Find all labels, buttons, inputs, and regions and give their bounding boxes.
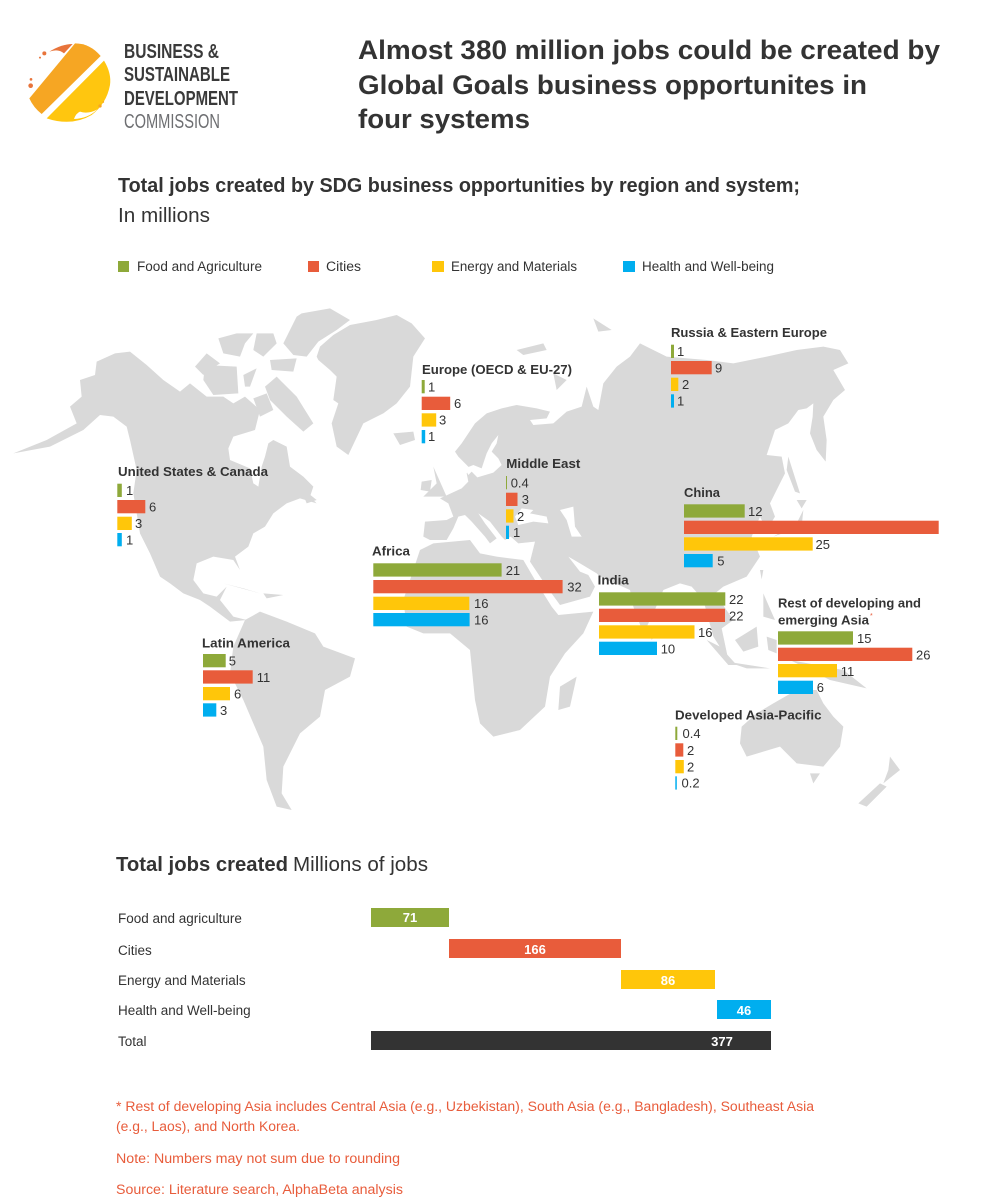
region: Russia & Eastern Europe: 1 — [677, 344, 684, 359]
footnotes — [116, 1099, 814, 1197]
row: food and agriculture — [118, 908, 449, 927]
inland seas — [465, 435, 582, 537]
row: energy and materials: Energy and Materials — [118, 973, 246, 988]
region: Middle East: 0.4 — [511, 476, 529, 490]
region: Latin America: 6 — [234, 686, 241, 702]
region: Russia & Eastern Europe: 9 — [715, 360, 722, 376]
region: Africa: Africa — [372, 544, 411, 559]
logo wordmark: COMMISSION — [124, 111, 220, 133]
region: United States & Canada: 1 — [126, 483, 133, 498]
region: Middle East: 1 — [513, 525, 520, 540]
Africa — [403, 540, 593, 737]
main title: Global Goals business opportunites in — [358, 70, 867, 100]
region: Europe: Europe (OECD & EU-27) — [422, 362, 572, 377]
row: health and well-being: Health and Well-being — [118, 1003, 251, 1018]
Eurasia — [423, 343, 848, 660]
region: Rest of developing and emerging Asia — [778, 596, 930, 695]
region: Latin America: 3 — [220, 703, 227, 718]
region: United States & Canada: 6 — [149, 500, 156, 514]
region: India: 10 — [661, 642, 675, 656]
row: energy and materials: 86 — [661, 973, 675, 988]
logo: Business & Sustainable Development Commission — [28, 41, 238, 133]
region: India: India — [598, 572, 629, 587]
logo mark: globe — [28, 43, 110, 122]
region: Latin America: 5 — [229, 654, 236, 668]
region: Europe: 1 — [428, 429, 435, 444]
region: Russia & Eastern Europe: 2 — [682, 377, 689, 392]
region: Rest of developing and emerging Asia: * — [870, 613, 873, 620]
footnotes: Source: Literature search, AlphaBeta analysis — [116, 1182, 403, 1197]
main title: four systems — [358, 104, 530, 134]
logo wordmark: SUSTAINABLE — [124, 64, 230, 86]
region: Africa: 32 — [567, 580, 582, 594]
region: Rest of developing and emerging Asia: Rest of developing and — [778, 596, 921, 611]
row: cities: 166 — [524, 942, 546, 957]
region: United States & Canada: 3 — [135, 516, 142, 531]
region: Rest of developing and emerging Asia: 15 — [857, 631, 871, 646]
region: Latin America: Latin America — [202, 635, 291, 650]
region: Africa — [372, 544, 582, 628]
region: United States & Canada: 1 — [126, 532, 133, 548]
region: Developed Asia-Pacific: 2 — [687, 760, 694, 774]
region: Latin America: 11 — [257, 670, 270, 685]
region: Rest of developing and emerging Asia: emerging Asia — [778, 612, 870, 627]
region: Europe: 6 — [454, 396, 461, 411]
region: Rest of developing and emerging Asia: 6 — [817, 680, 824, 695]
region: China: China — [684, 485, 721, 500]
main title — [358, 35, 940, 134]
region: Russia & Eastern Europe: 1 — [677, 394, 684, 408]
region: Developed Asia-Pacific: 0.2 — [682, 776, 700, 790]
region: Middle East — [506, 456, 581, 540]
legend — [118, 259, 774, 274]
region: India: 22 — [729, 592, 743, 607]
legend: Energy and Materials — [451, 259, 577, 274]
logo wordmark — [124, 41, 238, 133]
logo wordmark: BUSINESS & — [124, 41, 219, 63]
chart heading: In millions — [118, 205, 210, 227]
region: Europe: 1 — [428, 380, 435, 394]
row: food and agriculture: 71 — [403, 910, 417, 925]
region: Middle East: 2 — [517, 509, 524, 524]
row: total: Total — [118, 1034, 147, 1049]
region: India: 22 — [729, 608, 743, 624]
Greenland — [317, 315, 425, 455]
region: Africa: 21 — [506, 563, 520, 578]
region: Middle East: Middle East — [506, 456, 581, 471]
row: cities: Cities — [118, 943, 152, 958]
region: Middle East: 3 — [522, 492, 529, 507]
region: Rest of developing and emerging Asia: 11 — [841, 664, 854, 679]
footnotes: * Rest of developing Asia includes Central Asia (e.g., Uzbekistan), South Asia (e.g., Bangladesh), Southeast Asia — [116, 1099, 814, 1114]
main title: Almost 380 million jobs could be created by — [358, 35, 940, 65]
legend: Cities — [326, 259, 361, 274]
total jobs waterfall chart — [118, 908, 771, 1050]
chart heading: Total jobs created by SDG business opportunities by region and system; — [118, 175, 800, 197]
legend: Health and Well-being — [642, 259, 774, 274]
row: health and well-being: 46 — [737, 1003, 751, 1018]
row: food and agriculture: Food and agriculture — [118, 911, 242, 926]
region: China — [684, 485, 939, 568]
footnotes: Note: Numbers may not sum due to rounding — [116, 1151, 400, 1166]
region: Rest of developing and emerging Asia: 26 — [916, 648, 930, 662]
logo wordmark: DEVELOPMENT — [124, 88, 238, 110]
region: Africa: 16 — [474, 596, 488, 611]
chart heading — [118, 175, 800, 227]
region: Developed Asia-Pacific — [675, 707, 822, 790]
region: Latin America — [202, 635, 291, 718]
row: total: 377 — [711, 1034, 733, 1049]
row: energy and materials — [118, 970, 715, 989]
total jobs heading — [116, 854, 428, 876]
world map — [13, 308, 900, 810]
region: Europe — [422, 362, 572, 444]
region: United States & Canada — [117, 464, 269, 548]
region: China: 12 — [748, 504, 762, 519]
row: total — [118, 1031, 771, 1050]
region: Europe: 3 — [439, 412, 446, 428]
row: cities — [118, 939, 621, 958]
total jobs heading: Total jobs created — [116, 854, 288, 876]
legend: Food and Agriculture — [137, 259, 262, 274]
row: health and well-being — [118, 1000, 771, 1019]
region: China: 5 — [717, 554, 725, 568]
region: Russia & Eastern Europe — [671, 325, 827, 408]
region: India — [598, 572, 743, 656]
region: Developed Asia-Pacific: Developed Asia-Pacific — [675, 707, 822, 722]
region: Developed Asia-Pacific: 0.4 — [682, 726, 701, 741]
region: Africa: 16 — [474, 612, 488, 628]
region: Russia & Eastern Europe: Russia & Eastern Europe — [671, 325, 827, 340]
region: Developed Asia-Pacific: 2 — [687, 743, 694, 758]
footnotes: (e.g., Laos), and North Korea. — [116, 1119, 300, 1134]
total jobs heading: Millions of jobs — [293, 854, 428, 876]
region: India: 16 — [698, 625, 712, 640]
region: United States & Canada: United States & Canada — [118, 464, 269, 479]
region: China: 25 — [816, 537, 830, 552]
